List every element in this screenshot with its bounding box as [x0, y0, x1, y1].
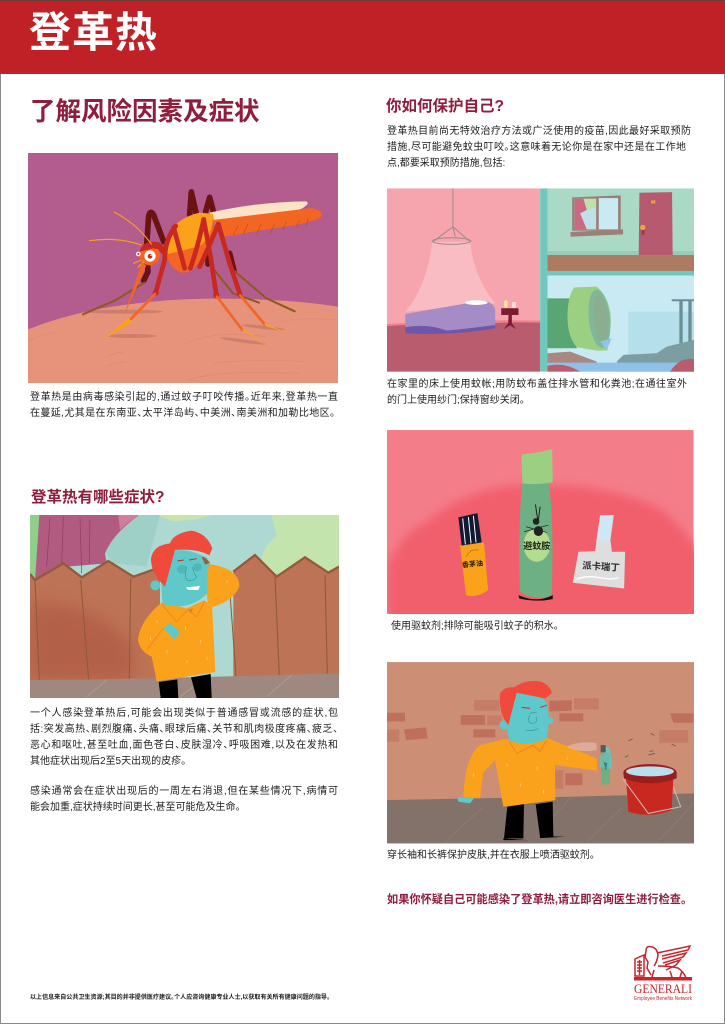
illustration: home protection scenes	[387, 188, 694, 372]
icon: picaridin bottle	[573, 515, 625, 588]
panel: covered drain pipe	[547, 276, 694, 372]
logo: Generali	[634, 945, 692, 1002]
text: symptoms	[30, 707, 338, 767]
text: what dengue is: 在蔓延,尤其是在东南亚、太平洋岛屿、中美洲、南美洲和加勒比地区。	[30, 408, 335, 419]
icon: DEET spray	[518, 449, 553, 601]
text: recovery: 感染通常会在症状出现后的一周左右消退,但在某些情况下,病情可	[30, 786, 338, 797]
logo: Generali: GENERALI	[634, 982, 692, 996]
text: repellent caption: 使用驱蚊剂;排除可能吸引蚊子的积水。	[391, 621, 559, 632]
icon: citronella bottle: 香茅油	[462, 558, 483, 570]
text: clothing caption: 穿长袖和长裤保护皮肤,并在衣服上喷洒驱蚊剂。	[387, 850, 595, 861]
icon: DEET spray: 避蚊胺	[523, 540, 550, 551]
text: symptoms: 括:突发高热、剧烈腹痛、头痛、眼球后痛、关节和肌肉极度疼痛、疲乏、	[30, 724, 338, 735]
text: symptoms: 其他症状出现后2至5天出现的皮疹。	[30, 756, 186, 767]
text: protection intro	[387, 125, 691, 169]
heading: symptoms: 登革热有哪些症状?	[31, 489, 164, 506]
icon: picaridin bottle: 派卡瑞丁	[582, 559, 620, 573]
header banner	[0, 0, 725, 74]
illustration: man with headache at fence	[30, 515, 339, 698]
logo: Generali: Employee Benefits Network	[634, 996, 692, 1002]
text: symptoms: 一个人感染登革热后,可能会出现类似于普通感冒或流感的症状,包	[30, 708, 338, 719]
illustration: mosquito on skin	[28, 153, 338, 383]
text: home protection caption	[387, 378, 687, 406]
text: home protection caption: 的门上使用纱门;保持窗纱关闭。	[387, 395, 525, 406]
title: 登革热	[29, 9, 158, 56]
text: protection intro: 点,都要采取预防措施,包括:	[387, 158, 505, 169]
callout: see a doctor: 如果你怀疑自己可能感染了登革热,请立即咨询医生进行检查。	[387, 894, 687, 906]
heading: protection: 你如何保护自己?	[386, 98, 504, 115]
illustration: man spraying repellent	[387, 662, 694, 844]
illustration: repellent products	[387, 430, 694, 614]
text: home protection caption: 在家里的床上使用蚊帐;用防蚊布盖住排水管和化粪池;在通往室外	[387, 379, 687, 390]
text: recovery: 能会加重,症状持续时间更长,甚至可能危及生命。	[30, 802, 241, 813]
heading: risk factors: 了解风险因素及症状	[30, 98, 260, 126]
text: protection intro: 措施,尽可能避免蚊虫叮咬。这意味着无论你是在家中还是在工作地	[387, 142, 686, 153]
panel: door and window	[547, 188, 694, 276]
text: what dengue is: 登革热是由病毒感染引起的,通过蚊子叮咬传播。近年来,登革热一直	[30, 392, 338, 403]
icon: water bucket	[623, 764, 681, 815]
text: recovery	[30, 785, 338, 813]
panel: bedroom with net	[387, 188, 540, 372]
text: protection intro: 登革热目前尚无特效治疗方法或广泛使用的疫苗,因此最好采取预防	[387, 126, 691, 137]
text: symptoms: 恶心和呕吐,甚至吐血,面色苍白、皮肤湿冷、呼吸困难,以及在发热和	[30, 740, 338, 751]
icon: citronella bottle	[458, 513, 488, 596]
footnote: 以上信息来自公共卫生资源;其目的并非提供医疗建议。个人应咨询健康专业人士,以获取有关所有健康问题的指导。	[30, 995, 330, 1001]
text: what dengue is	[30, 391, 338, 419]
